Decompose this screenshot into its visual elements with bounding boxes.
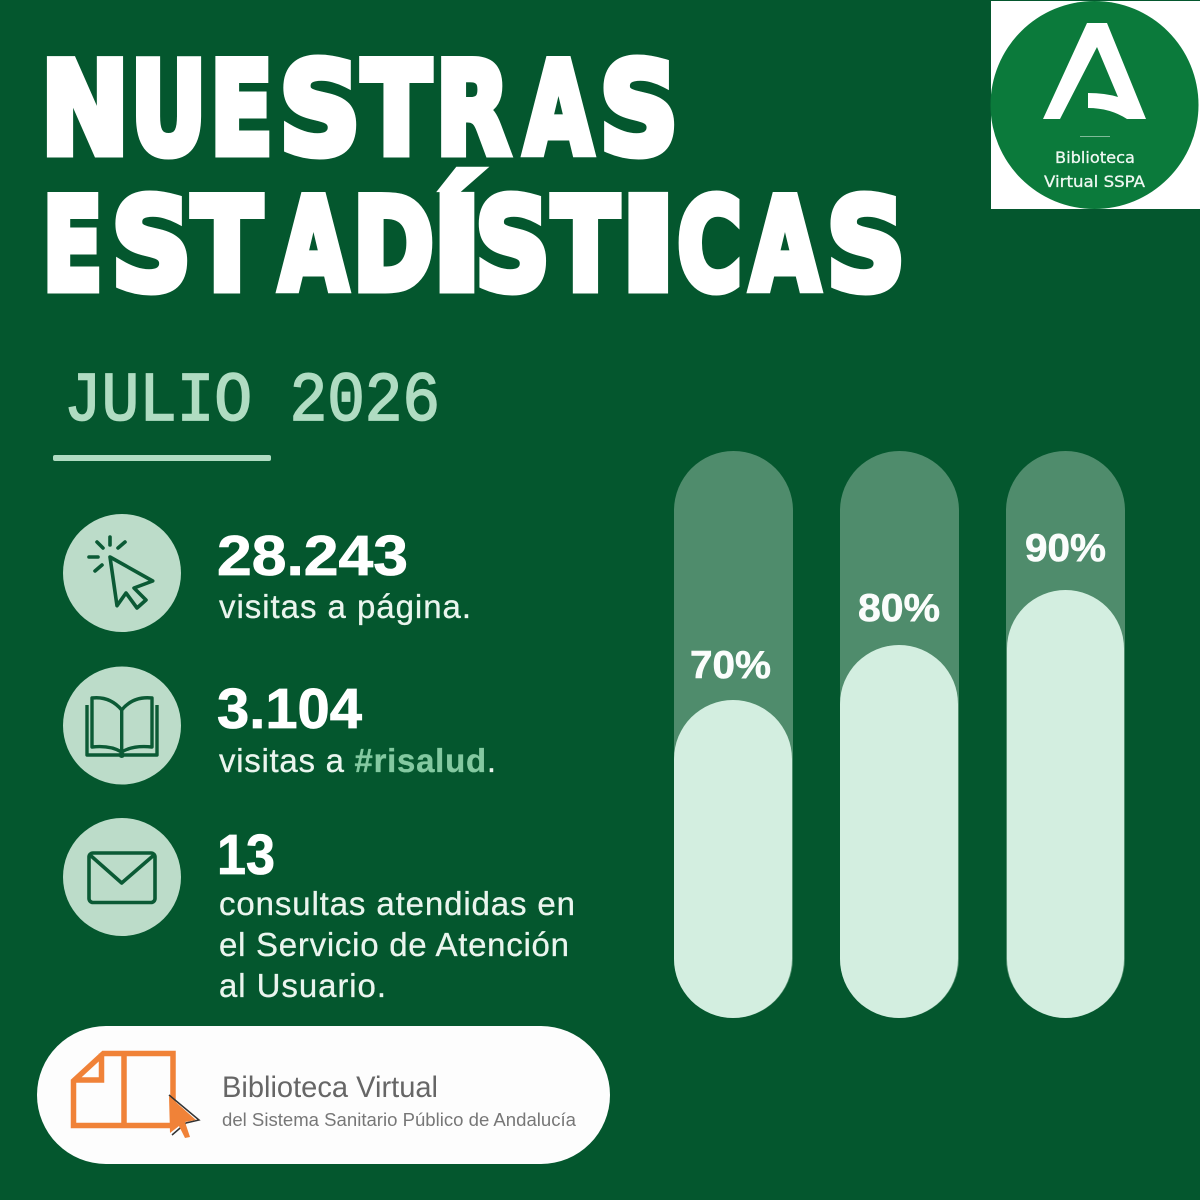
title: A [280,171,347,319]
stat: user inquiries: consultas atendidas en [219,885,575,922]
bar: 80% [840,451,959,1018]
title: D [353,171,434,319]
stat: user inquiries: el Servicio de Atención [219,926,569,963]
title: S [475,171,550,319]
footer logo pill [37,1026,610,1164]
title: S [826,171,905,319]
title: R [436,35,510,183]
stat: page visits: visitas a página. [219,588,471,625]
title: Í [432,171,482,319]
stat: user inquiries: al Usuario. [219,967,386,1004]
stat: risalud visits [217,677,496,779]
bar: 90% [1006,451,1125,1018]
title: S [279,35,360,183]
title: E [210,35,273,183]
stat: page visits: 28.243 [217,524,408,588]
title: C [677,171,742,319]
bar: 70% [674,451,793,1018]
footer logo text: Biblioteca Virtual [222,1071,438,1104]
title: I [620,171,677,319]
icon: orange book with cursor [74,1054,199,1138]
heading underline [53,455,271,461]
stat: user inquiries [217,823,575,1004]
bar: 80%: 80% [858,587,940,630]
title: S [600,35,678,183]
stat: page visits [217,524,471,625]
bar chart [674,451,1125,1018]
title: A [524,35,592,183]
icon: cursor [63,514,181,632]
logo: Biblioteca Virtual SSPA: Biblioteca [1055,148,1135,167]
title: N [41,35,129,183]
icon: envelope [63,818,181,936]
stat: user inquiries: 13 [217,823,275,887]
title: A [750,171,819,319]
icon: book [63,666,181,784]
title: T [192,171,262,319]
date heading: JULIO 2026 [64,363,440,442]
bar: 90%: 90% [1025,527,1106,570]
title [41,35,905,319]
logo: Biblioteca Virtual SSPA [990,1,1200,209]
footer logo text: del Sistema Sanitario Público de Andalucía [222,1110,577,1130]
logo: Biblioteca Virtual SSPA: Virtual SSPA [1044,172,1145,191]
title: E [42,171,102,319]
title: S [111,171,191,319]
bar: 70%: 70% [690,644,771,687]
title: U [131,35,206,183]
stat: risalud visits: 3.104 [217,677,362,741]
title: T [362,35,431,183]
title: T [552,171,619,319]
stat: risalud visits: visitas a #risalud. [219,742,496,779]
footer logo text [222,1071,577,1130]
